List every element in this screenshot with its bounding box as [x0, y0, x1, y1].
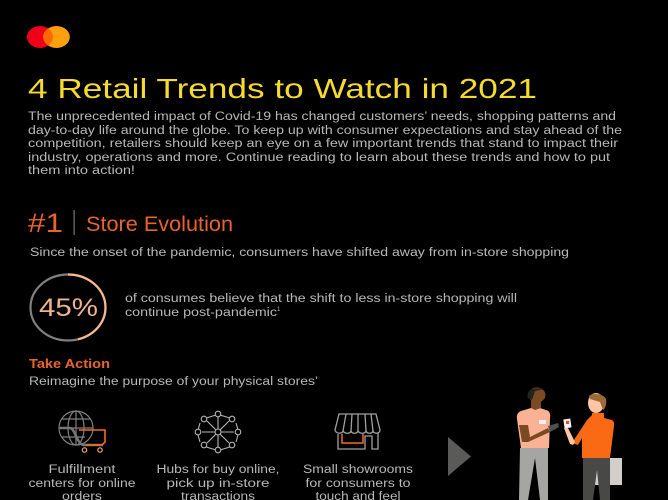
text block: introduction: day-to-day life around the globe. To keep up with consumer expectations and stay ahead of the — [28, 125, 622, 137]
illustration: associate and customer — [517, 388, 622, 500]
icon: storefront — [335, 414, 380, 449]
text: pandemic shift: Since the onset of the pandemic, consumers have shifted away from in-store shopping — [30, 247, 569, 259]
text: small showrooms — [303, 464, 413, 500]
text: statistic description: continue post-pandemic — [125, 307, 277, 319]
arrow — [448, 437, 471, 476]
heading: take action: Take Action — [29, 356, 110, 371]
text: statistic description: of consumes believe that the shift to less in-store shopping will — [125, 293, 517, 305]
text: hubs — [156, 464, 280, 500]
text: statistic description — [125, 293, 517, 319]
text: small showrooms: for consumers to — [306, 478, 410, 490]
text: fulfillment centers — [28, 464, 136, 500]
figure: customer — [563, 393, 622, 500]
chart: 45% ring: 45% — [39, 294, 98, 322]
title: 4 Retail Trends to Watch in 2021 — [28, 73, 537, 104]
text: reimagine: Reimagine the purpose of your physical stores’ — [29, 376, 318, 388]
heading: store evolution — [28, 208, 233, 238]
text: fulfillment centers: Fulfillment — [48, 464, 117, 476]
icon: globe with cart — [59, 411, 105, 452]
text: hubs: pick up in-store — [166, 478, 270, 490]
figure: store associate — [517, 388, 559, 500]
text: hubs: Hubs for buy online, — [156, 464, 280, 476]
heading: store evolution: Store Evolution — [86, 213, 233, 236]
text block: introduction — [28, 111, 622, 177]
text block: introduction: competition, retailers should keep an eye on a few important trends that stand to impact their — [28, 138, 618, 150]
heading: store evolution: #1 — [28, 208, 63, 238]
icon: hub network — [195, 411, 241, 453]
icon: logo — [27, 26, 70, 48]
text: fulfillment centers: centers for online — [28, 478, 136, 490]
text block: introduction: industry, operations and more. Continue reading to learn about these trends and how to put — [28, 152, 611, 164]
text block: introduction: them into action! — [28, 165, 135, 177]
chart: 45% ring — [30, 274, 106, 340]
text block: introduction: The unprecedented impact of Covid-19 has changed customers’ needs, shopping patterns and — [28, 111, 616, 123]
text: small showrooms: Small showrooms — [303, 464, 413, 476]
text: statistic description: 1 — [277, 307, 281, 313]
